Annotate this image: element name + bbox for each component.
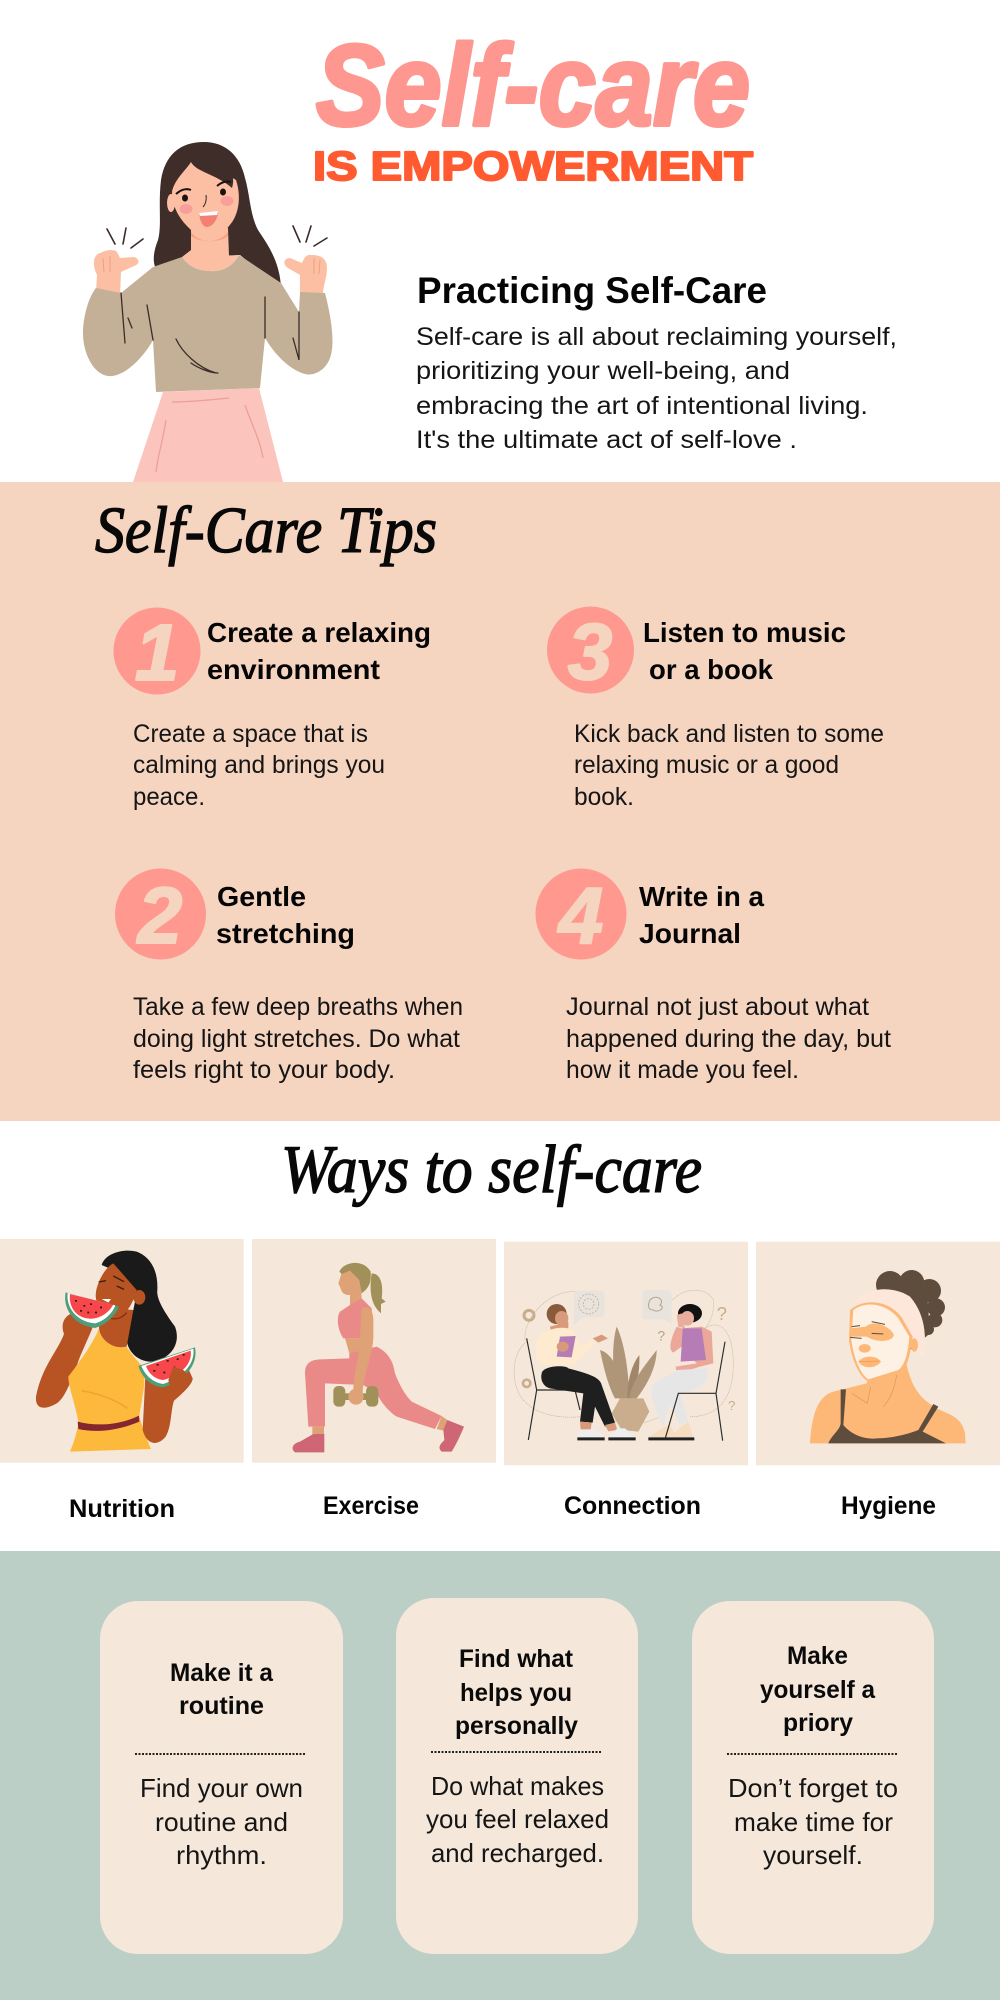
tip 3: relaxing music or a good (574, 751, 839, 779)
left hand (94, 250, 138, 296)
heading: Ways to self-care: Ways to self-care (281, 1131, 702, 1207)
tip 4: happened during the day, but (566, 1025, 891, 1053)
subtitle: is empowerment: IS EMPOWERMENT (313, 143, 753, 189)
tip 4: how it made you feel. (566, 1056, 799, 1084)
right person (648, 1304, 725, 1441)
tip 2: stretching (216, 918, 355, 949)
card: connection illustration: ? (717, 1303, 727, 1324)
card: make it a routine: rhythm. (176, 1840, 267, 1870)
heading: Practicing Self-Care: Practicing Self-Care (417, 270, 767, 311)
card: find what helps you personally: helps you (460, 1679, 572, 1707)
label: Connection: Connection (564, 1492, 701, 1520)
label: Nutrition: Nutrition (69, 1495, 175, 1523)
hair bun (876, 1270, 945, 1350)
card: make yourself a priory: Don’t forget to (728, 1773, 898, 1803)
tip 1: 1 (135, 608, 179, 697)
tip 1 (114, 608, 431, 811)
tip 2: feels right to your body. (133, 1056, 395, 1084)
skirt (133, 388, 283, 482)
card: make yourself a priory (692, 1601, 934, 1954)
tip 1: Create a space that is (133, 720, 368, 748)
intro paragraph: Self-care is all about reclaiming yourself, (416, 323, 897, 351)
card: make it a routine: Make it a (170, 1659, 274, 1687)
tip 4: Write in a (639, 881, 764, 912)
card: find what helps you personally: and recharged. (431, 1838, 604, 1868)
label: Exercise: Exercise (323, 1492, 419, 1520)
panel: self-care tips (0, 482, 1000, 1121)
intro paragraph (416, 323, 897, 454)
card: make yourself a priory: yourself a (760, 1676, 876, 1704)
watermelon slice, left (65, 1292, 119, 1328)
card: make yourself a priory: make time for (734, 1807, 893, 1837)
sweater (83, 255, 332, 392)
card: make it a routine: routine and (155, 1807, 288, 1837)
heading: Self-Care Tips: Self-Care Tips (95, 494, 437, 567)
card: nutrition illustration (0, 1239, 244, 1463)
card: hygiene illustration (756, 1242, 1000, 1465)
panel: reminders (0, 1551, 1000, 2000)
tip 2: Gentle (217, 881, 306, 912)
card: connection illustration: ? (657, 1328, 665, 1344)
title: Self-care: Self-care (316, 22, 750, 150)
tip 4: Journal not just about what (566, 993, 869, 1021)
card: make yourself a priory: Make (787, 1642, 848, 1670)
tip 3 (547, 606, 884, 811)
tip 1: calming and brings you (133, 751, 385, 779)
card: find what helps you personally: you feel relaxed (426, 1804, 609, 1834)
label: Hygiene: Hygiene (841, 1492, 936, 1520)
tip 3: Kick back and listen to some (574, 720, 884, 748)
card: find what helps you personally: personally (455, 1712, 578, 1740)
tip 3: or a book (649, 654, 773, 685)
tip 2: 2 (136, 871, 182, 960)
card: exercise illustration (252, 1239, 496, 1463)
card: connection illustration: ? (728, 1398, 735, 1413)
tip 2: doing light stretches. Do what (133, 1025, 460, 1053)
card: make it a routine: Find your own (140, 1773, 303, 1803)
tip 1: environment (207, 654, 380, 685)
tip 3: 3 (568, 607, 612, 696)
tip 3: book. (574, 783, 634, 811)
tip 2 (115, 868, 463, 1084)
intro paragraph: It's the ultimate act of self-love . (416, 426, 797, 454)
card: make yourself a priory: priory (783, 1709, 853, 1737)
card: find what helps you personally: Do what makes (431, 1771, 604, 1801)
tip 1: Create a relaxing (207, 617, 431, 648)
intro paragraph: prioritizing your well-being, and (416, 357, 790, 385)
card: make yourself a priory: yourself. (763, 1840, 863, 1870)
intro paragraph: embracing the art of intentional living. (416, 392, 868, 420)
card: connection illustration (504, 1242, 748, 1465)
illustration: woman giving thumbs up (83, 142, 332, 482)
tip 4 (536, 868, 891, 1084)
tip 2: Take a few deep breaths when (133, 993, 463, 1021)
right hand (284, 255, 327, 295)
card: find what helps you personally: Find what (459, 1645, 574, 1673)
tip 1: peace. (133, 783, 205, 811)
card: make it a routine (100, 1601, 343, 1954)
motion lines (107, 226, 327, 248)
card: make it a routine: routine (179, 1692, 264, 1720)
watermelon slice, right (138, 1347, 196, 1387)
plant (600, 1327, 657, 1432)
tip 4: Journal (639, 918, 741, 949)
left person (527, 1304, 636, 1440)
tip 3: Listen to music (643, 617, 846, 648)
tip 4: 4 (557, 871, 603, 960)
card: find what helps you personally (396, 1598, 638, 1954)
